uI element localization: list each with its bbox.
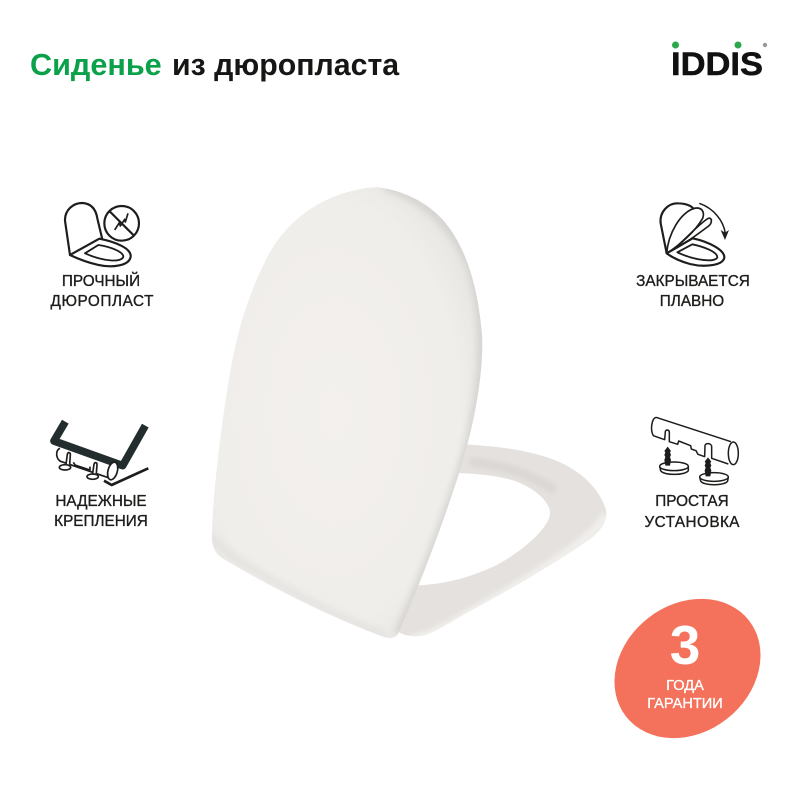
label: reliable fittings — [54, 493, 148, 530]
product: toilet seat ring — [399, 444, 606, 636]
warranty badge: 3 — [670, 614, 700, 676]
title: из дюропласта — [172, 49, 400, 82]
label: reliable fittings: КРЕПЛЕНИЯ — [54, 513, 148, 530]
label: reliable fittings: НАДЕЖНЫЕ — [55, 493, 147, 510]
label: simple installation: УСТАНОВКА — [644, 514, 740, 531]
title — [30, 48, 400, 82]
label: durable thermoset: ДЮРОПЛАСТ — [50, 293, 154, 310]
label: simple installation — [644, 493, 740, 531]
label: durable thermoset: ПРОЧНЫЙ — [62, 272, 140, 290]
icon: easy installation — [652, 417, 738, 485]
icon: reliable fittings — [54, 422, 148, 485]
label: closes softly: ЗАКРЫВАЕТСЯ — [636, 273, 750, 290]
warranty badge: ГАРАНТИИ — [647, 696, 723, 712]
icon: soft close — [661, 203, 729, 266]
label: closes softly — [636, 273, 750, 310]
warranty badge: ГОДА — [666, 678, 704, 694]
label: durable thermoset — [50, 272, 154, 310]
title: Сиденье — [30, 48, 162, 82]
logo: IDDIS: IDDIS — [671, 46, 763, 82]
warranty badge — [587, 570, 788, 767]
label: simple installation: ПРОСТАЯ — [655, 493, 729, 510]
label: closes softly: ПЛАВНО — [660, 293, 724, 310]
product: toilet seat lid — [212, 187, 482, 638]
icon: durable seat with no-crack sign — [65, 203, 139, 266]
